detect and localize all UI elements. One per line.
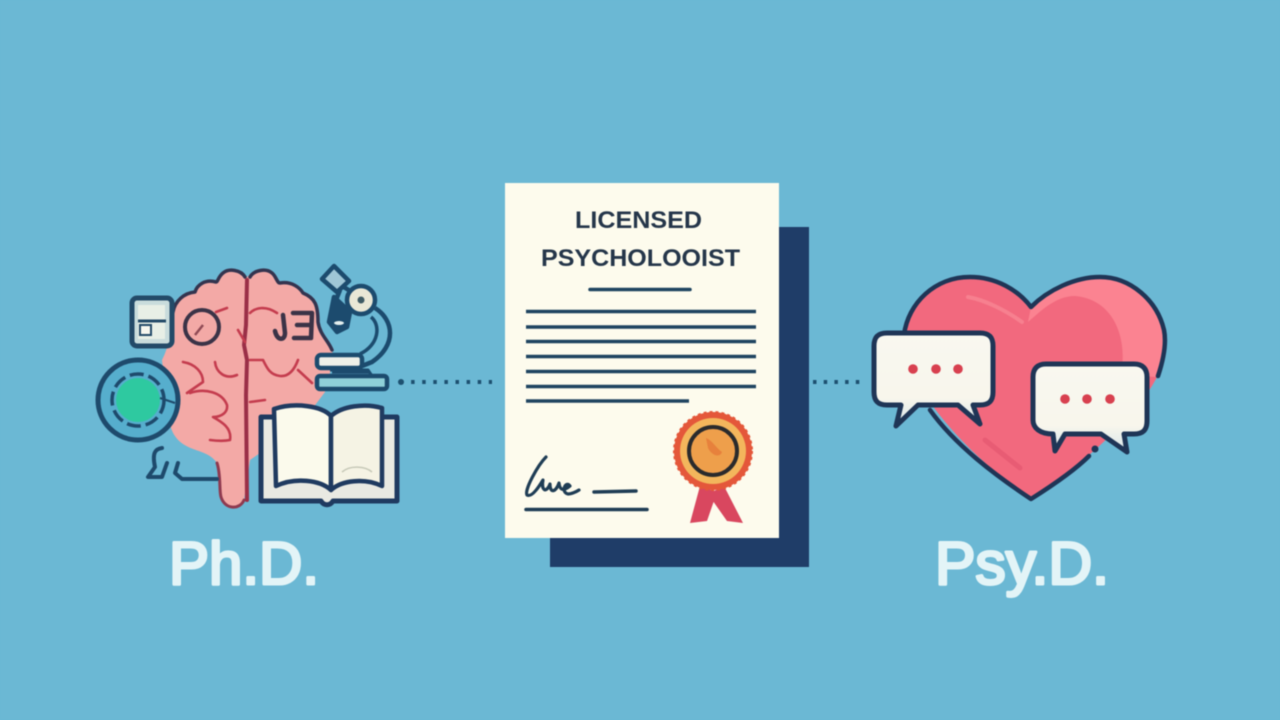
document sheet bbox=[505, 183, 779, 538]
title underline bbox=[590, 288, 690, 291]
document title bbox=[541, 207, 740, 272]
arrow: dotted connector from Ph.D. to licence bbox=[400, 380, 492, 384]
body text lines bbox=[526, 312, 756, 401]
icon: heart bbox=[903, 277, 1165, 499]
licence document bbox=[505, 183, 809, 567]
Ph.D. illustration: brain and research icons bbox=[98, 266, 404, 507]
arrow: dotted connector from Psy.D. to licence bbox=[813, 380, 865, 384]
icon: speech bubble right bbox=[1033, 364, 1147, 452]
seal ribbon bbox=[690, 486, 743, 523]
icon: squiggle connector bbox=[148, 448, 217, 479]
document title: PSYCHOLOOIST bbox=[541, 245, 740, 272]
label: Psy.D.: Psy.D. bbox=[935, 530, 1109, 597]
Psy.D. illustration: heart and speech bubbles bbox=[874, 277, 1165, 499]
label: Ph.D.: Ph.D. bbox=[169, 530, 319, 597]
icon: open book bbox=[261, 405, 397, 505]
icon: document card bbox=[132, 298, 172, 346]
icon: gauge on brain bbox=[185, 310, 219, 344]
icon: speech bubble left bbox=[874, 333, 993, 426]
icon: circular cell bbox=[98, 360, 178, 440]
icon: microscope bbox=[317, 266, 390, 389]
signature bbox=[526, 457, 647, 510]
certification seal bbox=[674, 412, 752, 490]
icon: brain bbox=[162, 270, 333, 507]
document shadow panel bbox=[550, 227, 809, 567]
document title: LICENSED bbox=[575, 207, 702, 234]
icon: music note on brain bbox=[275, 313, 312, 339]
